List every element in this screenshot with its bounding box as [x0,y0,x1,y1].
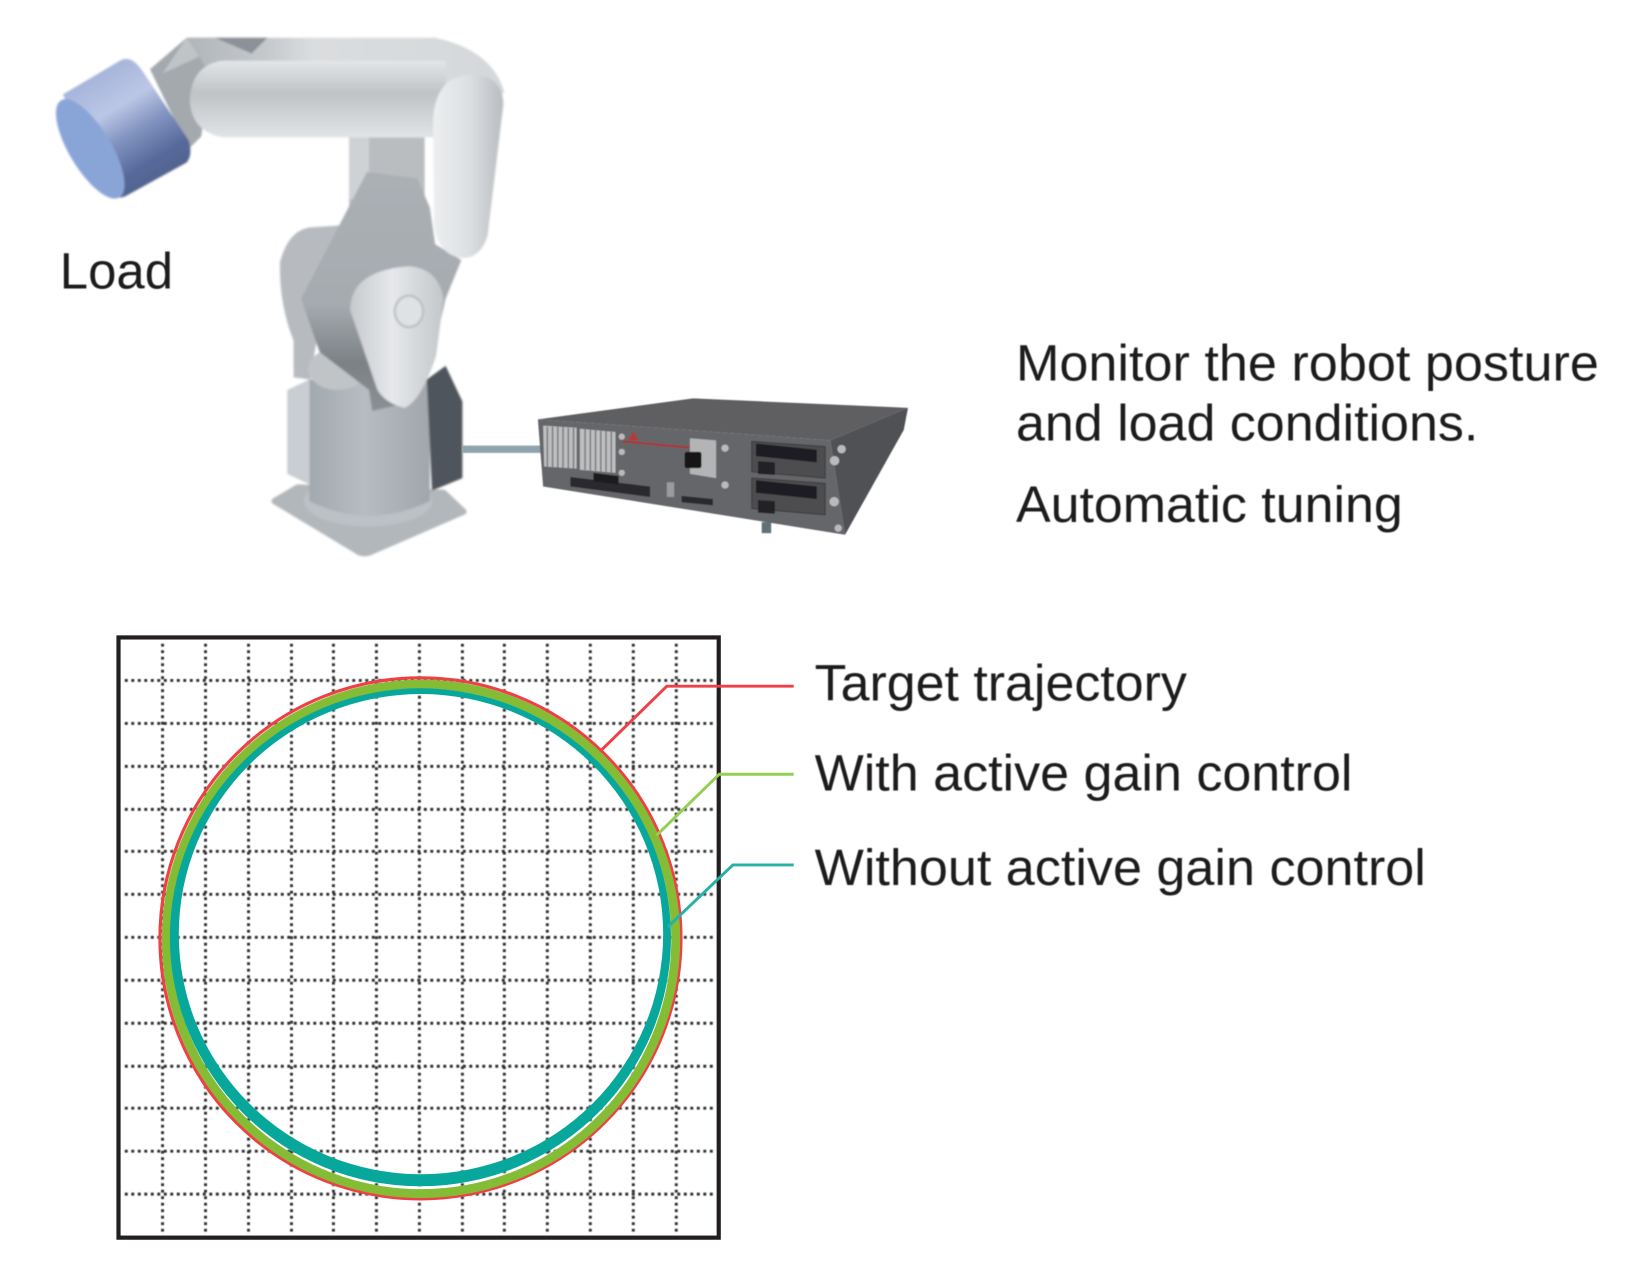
icon: robot shoulder paddle [350,266,444,408]
text block: monitoring and tuning: and load conditions. [1016,393,1478,451]
text block: monitoring and tuning [1016,334,1599,533]
icon: robot joint sphere [308,348,367,390]
chart: circular trajectory [119,637,719,1238]
controller side face [830,408,908,535]
leader line: with active gain control [656,774,794,836]
icon: robot upper arm front [190,61,446,137]
controller front face [538,419,845,535]
icon: robot wrist [150,38,225,149]
icon: robot upper arm back [187,38,504,105]
controller connectors [570,473,713,505]
trajectory: without active gain control [170,688,671,1186]
controller top face [538,398,908,440]
icon: robot side box [427,366,462,491]
controller slot two [752,478,825,515]
icon: load cylinder [43,59,190,208]
controller red stripe [623,441,690,448]
label: without active gain control: Without active gain control [815,838,1426,896]
text block: monitoring and tuning: Automatic tuning [1016,475,1403,533]
controller bolts [619,434,846,532]
icon: robot joint cap [395,296,423,327]
icon: robot upper column [349,137,425,210]
icon: robot shoulder back cover [280,225,341,380]
label: with active gain control: With active gain control [815,744,1353,802]
controller foot [762,522,771,533]
controller slot one [752,441,825,478]
controller logo [628,431,639,440]
leader line: target [601,686,794,751]
robot arm [43,38,504,553]
robot controller [538,398,908,535]
icon: robot base plate [275,488,463,553]
label: load: Load [60,241,173,299]
chart frame [119,637,719,1238]
icon: robot middle link [301,172,461,411]
icon: robot forearm [433,74,503,258]
icon: robot base column [287,380,432,526]
controller right vent [580,429,615,473]
controller network port [685,438,716,478]
chart grid [125,644,714,1233]
text block: monitoring and tuning: Monitor the robot posture [1016,334,1599,392]
label: target trajectory: Target trajectory [815,653,1187,711]
cable [462,446,542,453]
leader line: without active gain control [668,865,794,927]
controller left vent [543,426,577,469]
trajectory: with active gain control [166,684,676,1194]
trajectory: target [160,678,681,1199]
icon: robot upper arm notch [215,38,267,53]
